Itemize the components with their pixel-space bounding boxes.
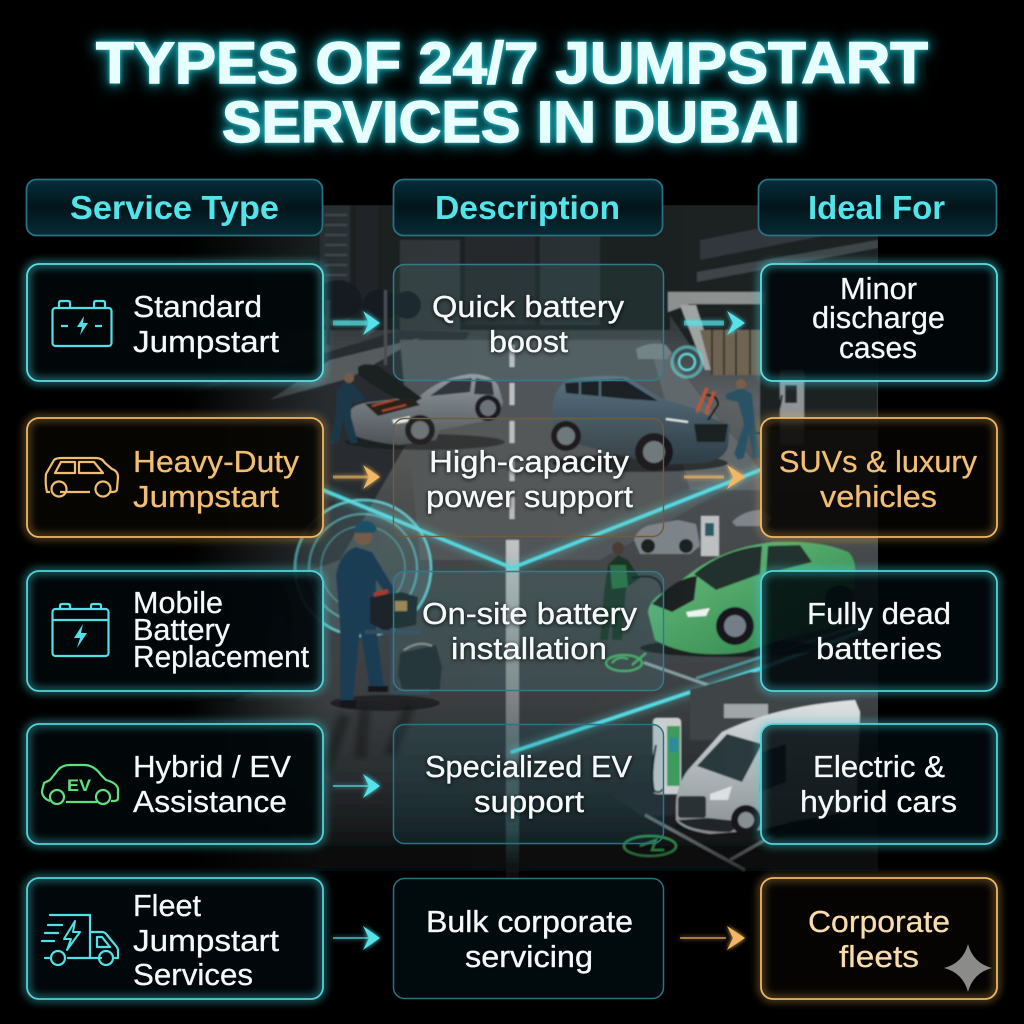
panel: Standard Jumpstart service: Jumpstart [133, 324, 279, 359]
icon: replacement battery [52, 604, 108, 656]
panel: Specialized EV support description: Specialized EV [425, 749, 632, 784]
panel: High-capacity power support description [394, 418, 664, 536]
dark parked car left [224, 692, 250, 701]
panel: Bulk corporate servicing description: servicing [465, 939, 593, 974]
panel: Hybrid / EV Assistance service: Assistance [133, 784, 287, 819]
low building behind van [689, 671, 778, 740]
sedan with open hood [345, 364, 505, 450]
arrow: heavy-duty row to ideal for [684, 465, 745, 489]
panel: Hybrid / EV Assistance service [27, 724, 323, 844]
panel: Mobile Battery Replacement service: Mobile [133, 585, 223, 620]
panel: Hybrid / EV Assistance service: Hybrid / EV [133, 749, 291, 784]
panel: Minor discharge cases: cases [839, 330, 917, 365]
icon: EV car [42, 765, 118, 804]
arrow: standard row to description [333, 311, 380, 335]
column header: Description: Description [435, 189, 620, 226]
arrow: fleet row to ideal for [680, 926, 745, 950]
parked cars middle right [634, 510, 772, 556]
panel: On-site battery installation description [394, 572, 664, 690]
panel: Fully dead batteries: Fully dead [807, 596, 951, 631]
panel: Fleet Jumpstart Services: Jumpstart [133, 923, 279, 958]
title [96, 31, 928, 155]
icon: hud ring [672, 347, 702, 377]
panel: Corporate fleets [761, 878, 997, 999]
panel: Electric and hybrid cars [761, 724, 997, 844]
panel: Fully dead batteries: batteries [816, 631, 942, 666]
teal guide lines [323, 470, 860, 752]
panel: Standard Jumpstart service: Standard [133, 289, 262, 324]
panel: Specialized EV support description [394, 724, 664, 844]
panel: Bulk corporate servicing description: Bulk corporate [426, 904, 633, 939]
panel: Fully dead batteries [761, 571, 997, 691]
panel: Mobile Battery Replacement service [27, 571, 323, 691]
panel: SUVs and luxury vehicles: SUVs & luxury [779, 444, 977, 479]
panel: Quick battery boost description: boost [489, 324, 568, 359]
panel: Quick battery boost description [394, 264, 664, 380]
panel: SUVs and luxury vehicles: vehicles [820, 479, 937, 514]
building and canopy right [636, 205, 878, 490]
SUV [551, 376, 730, 472]
panel: Minor discharge cases: Minor [840, 271, 917, 306]
title: SERVICES IN DUBAI [222, 90, 800, 155]
palm trees [314, 280, 421, 365]
EV charger upper right [756, 370, 806, 434]
column header: Description [394, 180, 662, 236]
panel: Fleet Jumpstart Services: Services [133, 957, 253, 992]
title: TYPES OF 24/7 JUMPSTART [96, 31, 928, 96]
panel: Heavy-Duty Jumpstart service: Heavy-Duty [133, 444, 300, 479]
panel: Minor discharge cases: discharge [812, 300, 945, 335]
mechanic at sedan [330, 373, 365, 444]
technician with battery cart [325, 521, 442, 770]
icon: sparkle watermark [944, 944, 992, 992]
buildings left [287, 205, 670, 330]
green EV car [640, 542, 855, 657]
panel: Heavy-Duty Jumpstart service: Jumpstart [133, 479, 279, 514]
panel: Fleet Jumpstart Services [27, 878, 323, 999]
panel: Standard Jumpstart service [27, 264, 323, 381]
panel: Quick battery boost description: Quick battery [432, 289, 625, 324]
mechanic at SUV [726, 379, 761, 460]
panel: Electric and hybrid cars: Electric & [813, 749, 945, 784]
panel: Mobile Battery Replacement service: Replacement [133, 639, 309, 674]
parking lines [644, 813, 771, 872]
column header: Ideal For [758, 180, 996, 236]
panel: Bulk corporate servicing description [394, 878, 664, 998]
arrow: standard row to ideal for [684, 311, 745, 335]
panel: Corporate fleets: Corporate [808, 904, 950, 939]
panel: Minor discharge cases [761, 264, 997, 381]
panel: High-capacity power support description: High-capacity [429, 444, 630, 479]
column header: Service Type: Service Type [70, 189, 279, 226]
EV charger lower [632, 716, 682, 814]
panel: Fleet Jumpstart Services: Fleet [133, 888, 201, 923]
panel: Specialized EV support description: support [474, 784, 584, 819]
worker at green EV [600, 542, 664, 640]
panel: On-site battery installation description: On-site battery [422, 596, 638, 631]
column header: Service Type [26, 180, 322, 236]
icon: battery [52, 301, 112, 346]
panel: Electric and hybrid cars: hybrid cars [800, 784, 957, 819]
hologram rings around technician [295, 500, 431, 636]
icon: delivery truck [42, 915, 118, 965]
panel: On-site battery installation description: installation [451, 631, 607, 666]
column header: Ideal For: Ideal For [808, 189, 945, 226]
arrow: heavy-duty row to description [333, 465, 380, 489]
icon: SUV outline [46, 458, 118, 496]
arrow: fleet row to description [333, 926, 380, 950]
panel: High-capacity power support description: power support [426, 479, 633, 514]
panel: Heavy-Duty Jumpstart service [27, 418, 323, 537]
white van [675, 700, 860, 836]
panel: Corporate fleets: fleets [839, 939, 919, 974]
green floor marks [606, 653, 676, 856]
arrow: EV row to description [333, 774, 380, 798]
panel: Mobile Battery Replacement service: Battery [133, 612, 230, 647]
icon: EV car: EV [67, 776, 92, 795]
panel: SUVs and luxury vehicles [761, 418, 997, 537]
road [170, 330, 760, 880]
illustration: Dubai street scene with service vehicles [200, 205, 878, 878]
